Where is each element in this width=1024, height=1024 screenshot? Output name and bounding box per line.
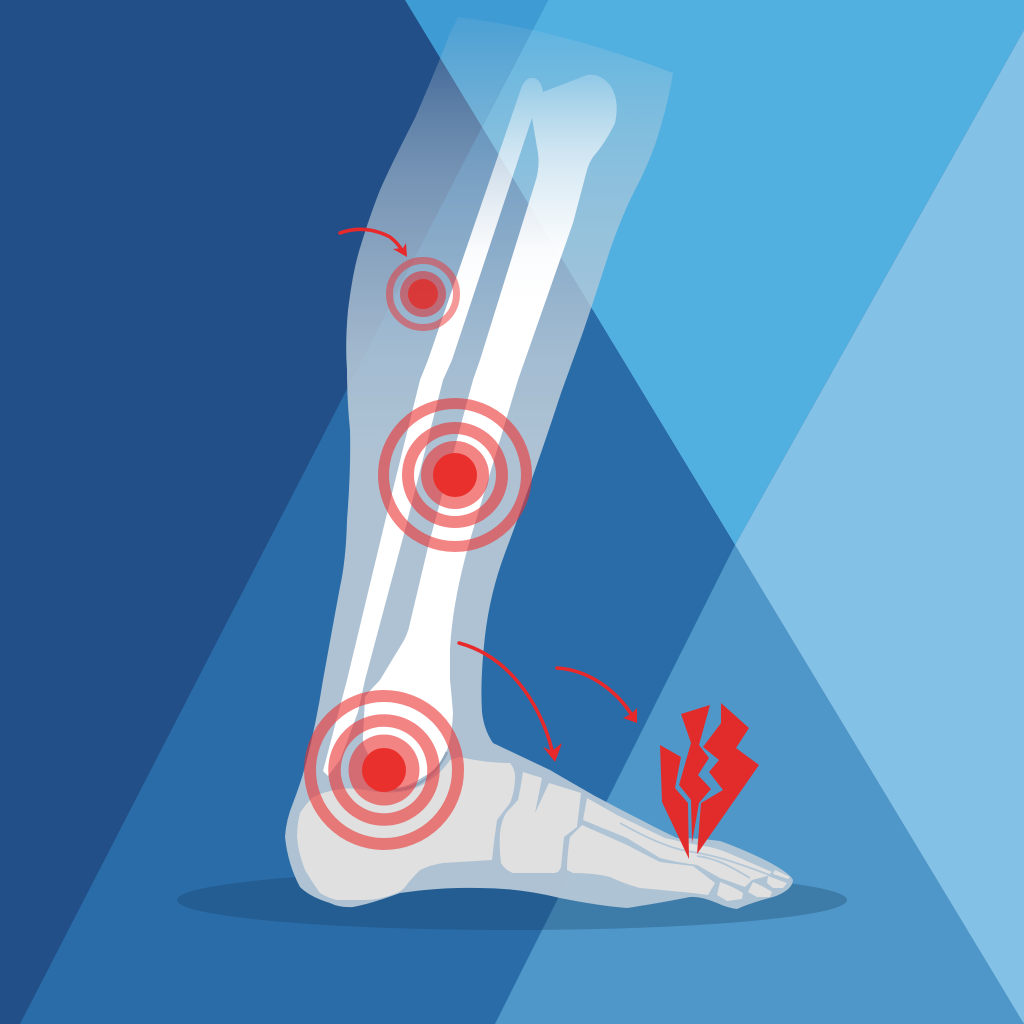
fourth toe — [773, 870, 790, 879]
pain target: upper shin — [390, 260, 456, 328]
heel and talus bone — [297, 757, 515, 900]
foot bones — [297, 757, 790, 901]
big toe — [717, 882, 743, 901]
midfoot bones — [500, 772, 581, 873]
third toe — [767, 876, 787, 888]
upper metatarsals — [583, 798, 772, 887]
tibia bone — [363, 75, 617, 788]
arrow: to toes — [557, 668, 637, 723]
pain target: mid shin — [384, 404, 526, 546]
fibula bone — [323, 78, 543, 776]
lower metatarsal — [567, 825, 715, 895]
arrow: to top of foot — [459, 643, 562, 762]
ankle joint shadow — [393, 752, 447, 790]
ground shadow — [177, 870, 847, 930]
soft tissue leg silhouette — [285, 17, 793, 909]
second toe — [748, 882, 772, 897]
pain target: ankle — [310, 696, 458, 844]
arrow: to upper shin — [340, 229, 407, 257]
metatarsal separation lines — [620, 823, 772, 878]
icon: lightning pain bolts — [660, 703, 759, 859]
